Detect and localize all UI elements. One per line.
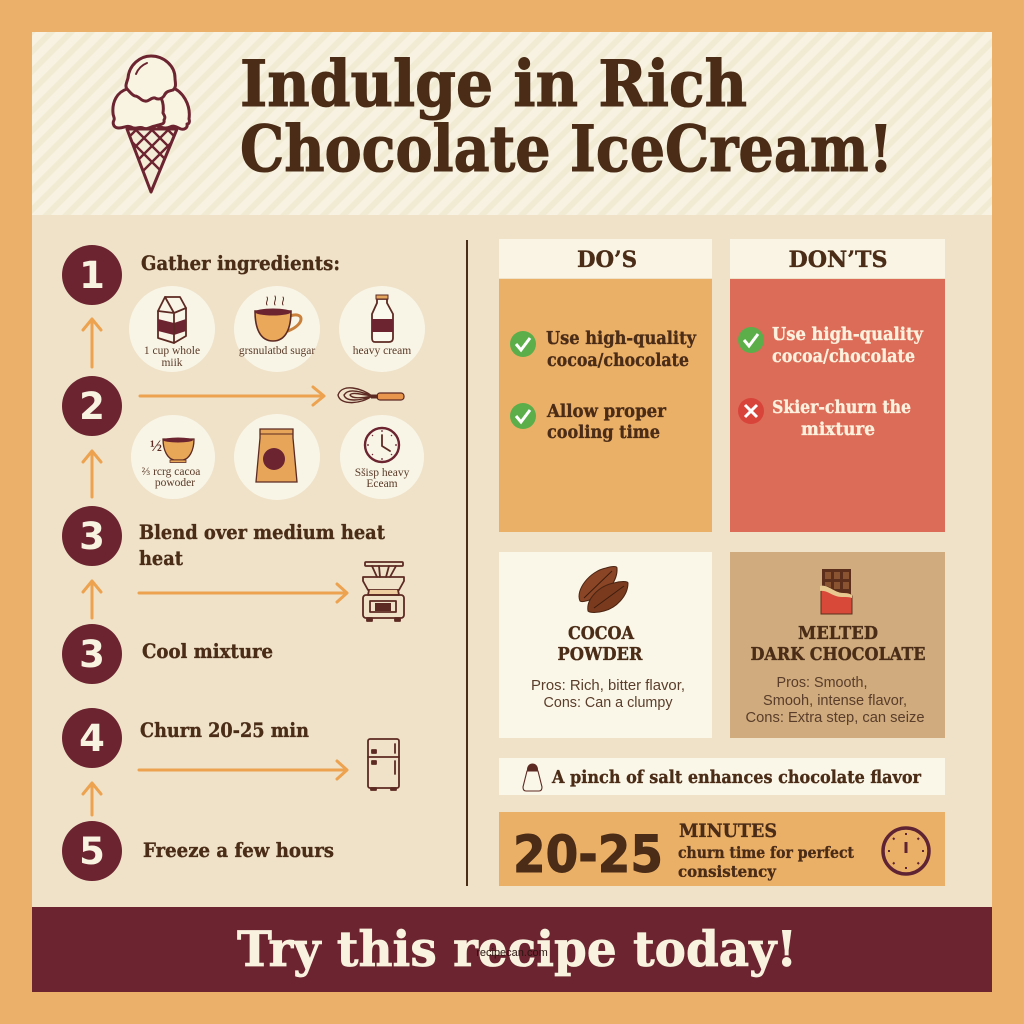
footer banner — [32, 907, 992, 992]
icon: timer — [883, 828, 929, 874]
step 4 badge: 4 — [79, 717, 105, 760]
step 3b badge: 3 — [79, 633, 105, 676]
cocoa powder heading: COCOA — [568, 624, 634, 644]
title: Indulge in Rich — [240, 47, 747, 122]
step 4 badge — [62, 708, 122, 768]
don't item 1: cocoa/chocolate — [772, 347, 915, 367]
don't item 2: mixture — [801, 420, 875, 440]
panel: melted dark chocolate — [730, 552, 945, 738]
arrow: up to step 1 — [83, 319, 101, 367]
step 3b badge — [62, 624, 122, 684]
step 1 badge — [62, 245, 122, 305]
do item 1 — [510, 329, 697, 371]
do item 2 — [510, 402, 667, 443]
icon: fridge — [368, 739, 399, 790]
step 5 badge — [62, 821, 122, 881]
melted chocolate pros and cons: Pros: Smooth, — [776, 675, 868, 691]
arrow: up to step 2 — [83, 451, 101, 497]
ingredient: cocoa powder: ⅔ rcrg cacoa — [142, 466, 200, 478]
do item 1: cocoa/chocolate — [547, 351, 689, 371]
icon: chocolate bar — [820, 569, 852, 614]
icon: mixer — [363, 562, 404, 621]
arrow: up to step 3b — [83, 581, 101, 618]
step 2 badge: 2 — [79, 385, 105, 428]
step 3 badge — [62, 506, 122, 566]
step 1 label: Gather ingredients: — [141, 251, 340, 275]
arrow: step 2 to whisk — [140, 387, 324, 405]
panel: steps — [62, 245, 425, 881]
ingredient: cocoa powder: powoder — [155, 477, 195, 489]
step 3 label: Blend over medium heat — [139, 520, 386, 544]
don't item 2: Skier-churn the — [772, 398, 911, 418]
title — [240, 47, 893, 187]
header banner — [32, 32, 992, 215]
don't item 1: Use high-quality — [772, 325, 924, 345]
melted chocolate pros and cons: Cons: Extra step, can seize — [746, 710, 924, 726]
ingredient: granulated sugar — [234, 286, 320, 372]
do's heading: DO’S — [577, 247, 637, 273]
cocoa powder heading: POWDER — [558, 645, 643, 665]
ingredient: heavy cream — [339, 286, 425, 372]
ingredient: cocoa powder — [131, 415, 215, 499]
cocoa powder pros and cons: Cons: Can a clumpy — [544, 695, 673, 711]
callout: churn time — [499, 812, 945, 886]
ingredient: cocoa bag — [234, 414, 320, 500]
ingredient: heavy cream clock: Eceam — [366, 478, 398, 490]
don'ts heading: DON’TS — [788, 247, 888, 273]
ingredient: whole milk — [129, 286, 215, 372]
arrow: step 4 to fridge — [139, 761, 347, 779]
icon: ice cream cone — [113, 56, 190, 192]
callout: salt tip — [499, 758, 945, 795]
ingredient: heavy cream clock — [340, 415, 424, 499]
ingredient: whole milk: 1 cup whole — [144, 345, 200, 357]
ingredient: granulated sugar: grsnulatbd sugar — [239, 345, 315, 357]
step 5 label: Freeze a few hours — [143, 838, 334, 862]
melted dark chocolate heading: MELTED — [798, 624, 878, 644]
step 4 label: Churn 20-25 min — [140, 718, 309, 742]
step 3 badge: 3 — [79, 515, 105, 558]
arrow: up to step 5 — [83, 783, 101, 815]
cocoa powder pros and cons: Pros: Rich, bitter flavor, — [531, 678, 685, 694]
step 5 badge: 5 — [79, 830, 105, 873]
icon: salt shaker — [523, 764, 542, 791]
panel: do's — [499, 239, 712, 532]
icon: cocoa beans — [579, 566, 628, 612]
do item 2: Allow proper — [546, 402, 667, 422]
ingredient: heavy cream clock: Sšisp heavy — [355, 467, 410, 479]
footer banner: recipecan.com — [476, 947, 548, 959]
footer banner: Try this recipe today! — [237, 920, 797, 978]
ingredient: heavy cream: heavy cream — [353, 345, 411, 357]
icon: whisk — [338, 388, 404, 403]
melted chocolate pros and cons — [746, 675, 924, 726]
cocoa powder heading — [558, 624, 643, 665]
ingredient: cocoa powder: ½ — [150, 438, 162, 455]
ingredient: whole milk: miik — [161, 357, 183, 369]
don't item 2 — [738, 398, 911, 440]
arrow: step 3 to mixer — [139, 584, 347, 602]
step 3b label: Cool mixture — [142, 639, 273, 663]
melted chocolate pros and cons: Smooh, intense flavor, — [763, 693, 907, 709]
callout: churn time: 20-25 — [513, 826, 663, 885]
callout: churn time: churn time for perfect — [678, 843, 855, 862]
step 2 badge — [62, 376, 122, 436]
melted dark chocolate heading — [750, 624, 926, 665]
cocoa powder pros and cons — [531, 678, 685, 711]
do item 2: cooling time — [547, 423, 660, 443]
callout: churn time: MINUTES — [679, 821, 777, 842]
panel: don'ts — [730, 239, 945, 532]
callout: salt tip: A pinch of salt enhances chocolate flavor — [551, 767, 921, 788]
title: Chocolate IceCream! — [240, 112, 893, 187]
panel: cocoa powder — [499, 552, 712, 738]
callout: churn time: consistency — [678, 862, 777, 881]
step 3 label — [139, 520, 386, 570]
don't item 1 — [738, 325, 924, 367]
do item 1: Use high-quality — [546, 329, 697, 349]
step 1 badge: 1 — [79, 254, 105, 297]
step 3 label: heat — [139, 546, 184, 570]
melted dark chocolate heading: DARK CHOCOLATE — [750, 645, 926, 665]
